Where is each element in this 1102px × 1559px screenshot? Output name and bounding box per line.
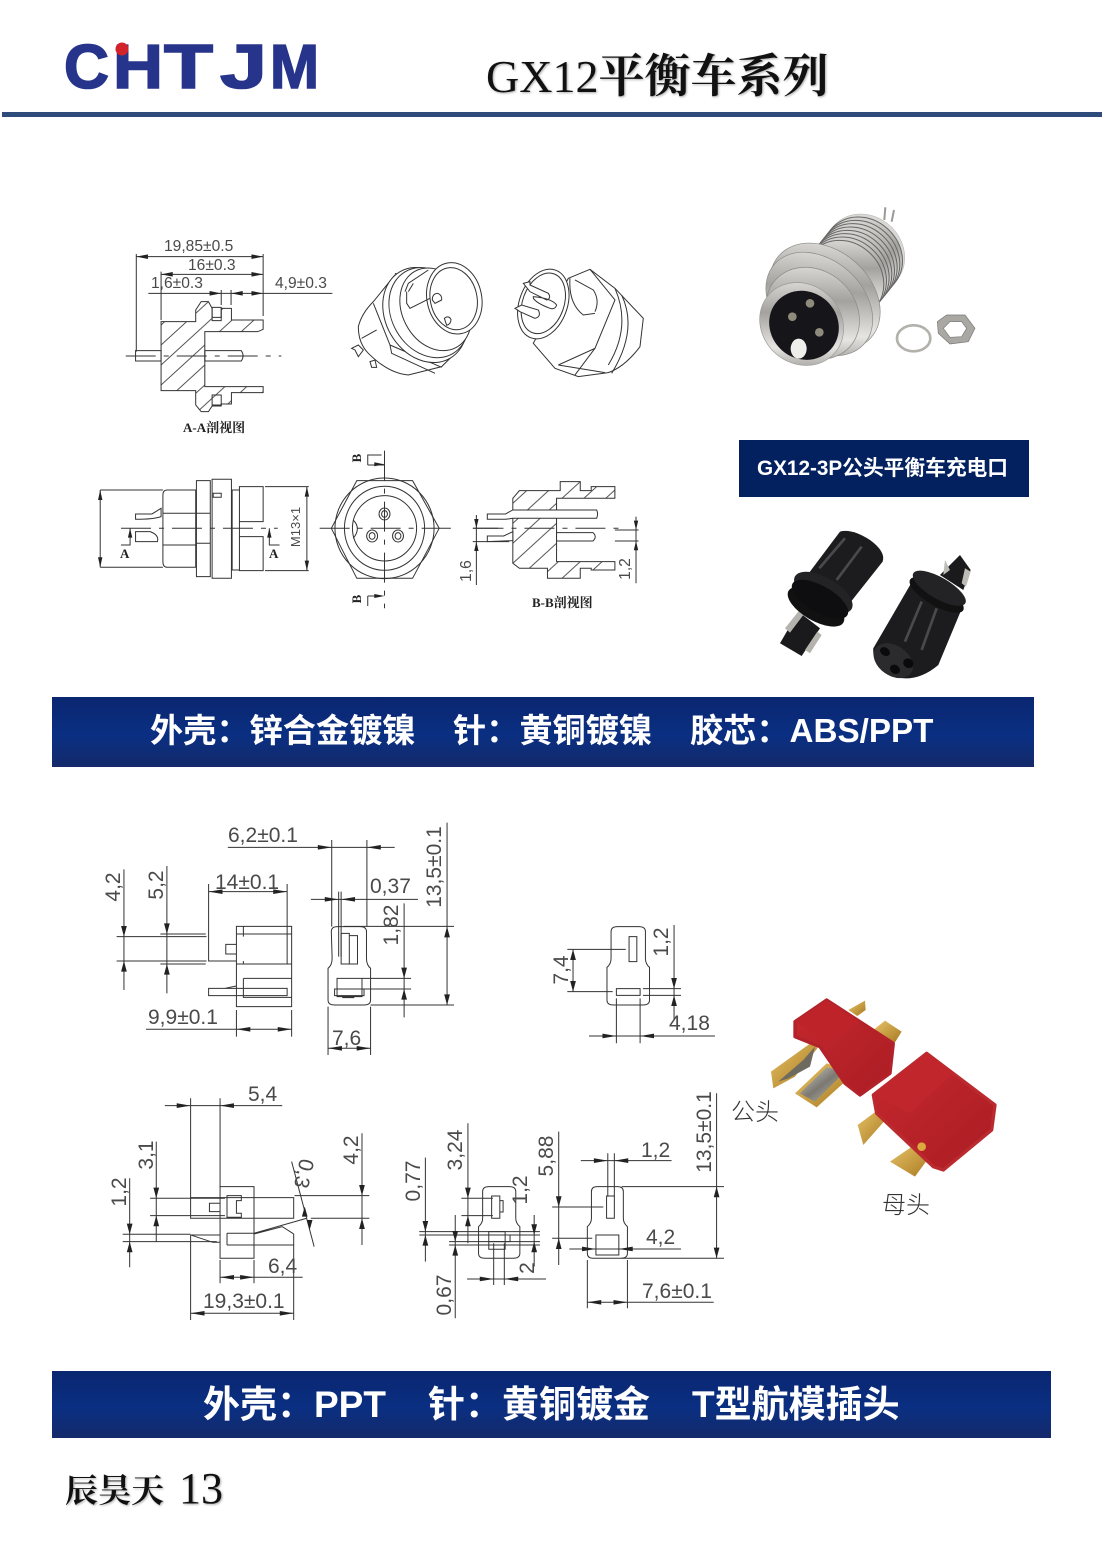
banner: GX12 materials: 胶芯：ABS/PPT	[690, 713, 933, 750]
header rule	[2, 112, 1102, 117]
banner: T plug materials: 外壳：PPT	[203, 1384, 386, 1425]
dimension labels and section captions: B	[349, 594, 364, 603]
logo: T	[164, 33, 213, 102]
dimension labels and section captions: 4,9±0.3	[275, 275, 327, 292]
T plug dimension labels: 7,6±0.1	[642, 1280, 712, 1303]
dimension labels and section captions: M13×1	[288, 507, 303, 547]
A-A section view	[126, 254, 332, 412]
side view of T plug	[117, 866, 292, 1037]
T plug dimension labels: 14±0.1	[215, 871, 279, 894]
logo: C	[64, 33, 109, 102]
banner: GX12 materials	[52, 697, 1034, 767]
label: GX12-3P: GX12-3P公头平衡车充电口	[757, 457, 1008, 480]
label: female plug: 母头	[882, 1185, 930, 1220]
dimension labels and section captions: 1,6	[458, 560, 475, 582]
footer: page number: 13	[179, 1464, 223, 1513]
T plug dimension labels: 4,2	[646, 1226, 675, 1249]
dimension labels and section captions: 16±0.3	[188, 257, 236, 274]
T plug dimension labels: 1,82	[380, 905, 403, 945]
T plug dimension labels: 0,3	[289, 1157, 318, 1190]
T plug dimension labels: 6,2±0.1	[228, 824, 298, 847]
banner: T plug materials: 针：黄铜镀金	[428, 1384, 650, 1425]
T plug dimension labels: 13,5±0.1	[423, 826, 446, 908]
logo: H	[113, 33, 163, 102]
T plug dimension labels: 19,3±0.1	[203, 1290, 285, 1313]
front view of T plug	[228, 823, 454, 1055]
isometric view, rear pins	[508, 262, 643, 377]
lower-right front view	[552, 1093, 724, 1308]
photo: metal GX12 connector with washer and nut	[743, 198, 975, 383]
dimension labels and section captions: B	[349, 453, 364, 462]
photo: black plastic inserts	[780, 531, 971, 685]
banner: T plug materials	[52, 1371, 1051, 1438]
dimension labels and section captions: 1,6±0.3	[151, 275, 203, 292]
T plug dimension labels: 13,5±0.1	[693, 1091, 716, 1173]
banner: GX12 materials: 外壳：锌合金镀镍	[150, 713, 416, 750]
small view with 7,4 and 4,18	[567, 925, 715, 1043]
logo: M	[270, 33, 319, 102]
T plug dimension labels: 5,4	[248, 1083, 278, 1106]
B-B section view	[473, 482, 639, 585]
T plug dimension labels: 6,4	[268, 1255, 298, 1278]
T plug dimension labels: 7,6	[332, 1027, 361, 1050]
T plug dimension labels: 1,2	[108, 1177, 131, 1207]
front view, three pins	[320, 451, 451, 608]
banner: GX12 materials: 针：黄铜镀镍	[453, 713, 652, 750]
label: GX12-3P	[739, 440, 1029, 497]
T plug dimension labels: 7,4	[550, 955, 573, 985]
T plug dimension labels: 4,18	[669, 1012, 710, 1035]
T plug dimension labels: 5,2	[145, 870, 168, 900]
logo	[64, 33, 319, 102]
banner: T plug materials: T型航模插头	[692, 1384, 900, 1425]
T plug dimension labels: 3,24	[444, 1129, 467, 1170]
logo: J	[220, 33, 267, 102]
T plug dimension labels: 3,1	[135, 1140, 158, 1170]
T plug dimension labels: 0,67	[433, 1275, 456, 1315]
dimension labels and section captions: A-A剖视图	[183, 420, 245, 435]
dimension labels and section captions: 19,85±0.5	[164, 238, 234, 255]
T plug dimension labels: 0,77	[402, 1161, 425, 1201]
T plug dimension labels: 5,88	[535, 1136, 558, 1176]
dimension labels and section captions: 1,2	[617, 558, 634, 580]
dimension labels and section captions	[120, 238, 634, 610]
lower-left side view with 19,3	[123, 1098, 369, 1320]
T plug dimension labels: 4,2	[340, 1135, 363, 1165]
T plug dimension labels: 0,37	[370, 875, 411, 898]
T plug dimension labels: 9,9±0.1	[148, 1006, 218, 1029]
label: male plug: 公头	[731, 1092, 779, 1127]
T plug dimension labels: 1,2	[509, 1175, 532, 1205]
T plug dimension labels: 4,2	[102, 872, 125, 902]
dimension labels and section captions: A	[269, 546, 279, 561]
T plug dimension labels: 2	[516, 1262, 539, 1274]
isometric view, plug face	[352, 252, 489, 378]
T plug dimension labels: 1,2	[641, 1139, 670, 1162]
technical drawing: T plug	[102, 823, 724, 1320]
lower-centre front view	[419, 1123, 546, 1318]
footer: company name: 辰昊天	[65, 1474, 164, 1510]
dimension labels and section captions: B-B剖视图	[532, 595, 593, 610]
T plug dimension labels	[102, 824, 716, 1315]
title: GX12平衡车系列	[486, 51, 828, 102]
technical drawing: GX12 connector	[98, 238, 643, 610]
dimension labels and section captions: A	[120, 546, 130, 561]
photo: red T plugs, male and female	[771, 1000, 995, 1177]
T plug dimension labels: 1,2	[650, 927, 673, 957]
side view with M13x1 dimension	[98, 479, 309, 578]
